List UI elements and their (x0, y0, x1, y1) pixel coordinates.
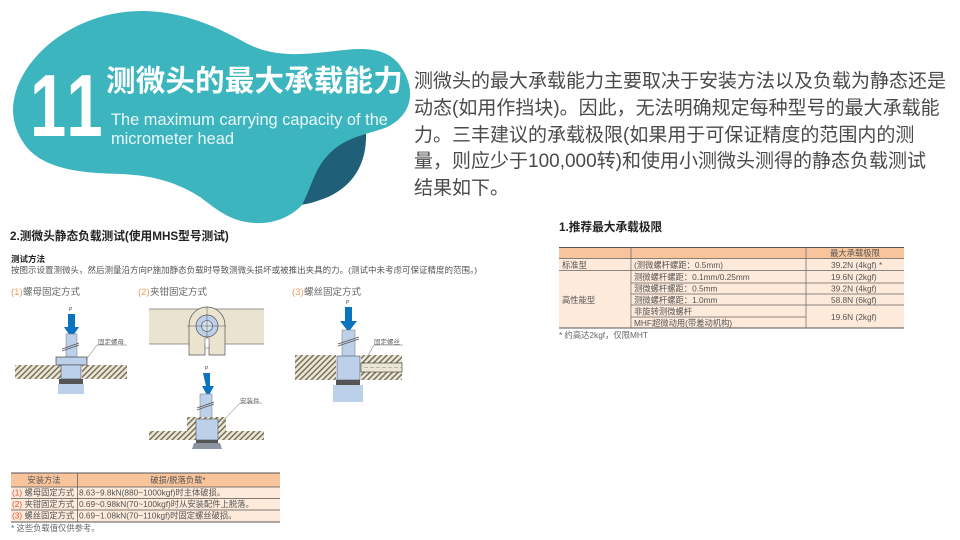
diagram 1: nut fixing: P (69, 307, 73, 313)
table: recommended limits: 测微螺杆螺距：1.0mm (634, 295, 718, 305)
section number: 11 (30, 56, 106, 155)
table: breaking load: 安装方法 (27, 475, 61, 485)
body paragraph (414, 70, 946, 198)
section heading: recommended limits: 1.推荐最大承载极限 (559, 221, 662, 234)
table: recommended limits: 58.8N (6kgf) (831, 295, 877, 305)
diagram 1: nut fixing (11, 286, 127, 394)
table: recommended limits (559, 247, 904, 340)
diagram 3: screw fixing: (3) (292, 287, 304, 298)
diagram 1: nut fixing: 螺母固定方式 (23, 286, 81, 298)
body paragraph: 力。三丰建议的承载极限(如果用于可保证精度的范围内的测 (414, 124, 914, 146)
table: breaking load: (1) 螺母固定方式 (12, 488, 75, 498)
table: breaking load: 0.69~1.08kN(70~110kgf)时固定螺丝破损。 (79, 510, 237, 520)
diagram 1: nut fixing: (1) (11, 287, 23, 298)
diagram 2: clamp fixing (138, 286, 264, 449)
test method text: 按图示设置测微头，然后测量沿方向P施加静态负载时导致测微头损坏或被推出夹具的力。(测试中未考虑可保证精度的范围。) (11, 265, 477, 275)
title: 测微头的最大承载能力 (106, 65, 403, 98)
table: breaking load: 破损/脱落负载* (150, 475, 206, 485)
table: breaking load: 0.69~0.98kN(70~100kgf)时从安装配件上脱落。 (79, 499, 254, 509)
table: recommended limits: 19.6N (2kgf) (831, 312, 877, 322)
body paragraph: 量，则应少于100,000转)和使用小测微头测得的静态负载测试 (414, 150, 926, 172)
table: breaking load (11, 473, 280, 533)
table: recommended limits: (测微螺杆螺距：0.5mm) (634, 260, 723, 270)
table: recommended limits: 标准型 (562, 260, 587, 270)
section heading: static load test: 2.测微头静态负载测试(使用MHS型号测试) (10, 230, 229, 243)
test method text: 测试方法 (11, 254, 45, 264)
body paragraph: 测微头的最大承载能力主要取决于安装方法以及负载为静态还是 (414, 70, 946, 92)
diagram 2: clamp fixing: 安装件 (240, 396, 260, 405)
english subtitle: micrometer head (111, 130, 234, 148)
table: recommended limits: 39.2N (4kgf) (831, 284, 877, 294)
diagram 2: clamp fixing: P (205, 366, 209, 372)
diagram 3: screw fixing: P (346, 300, 350, 306)
table: recommended limits: 39.2N (4kgf) * (831, 260, 883, 270)
table: recommended limits: MHF超微动用(带差动机构) (634, 318, 732, 328)
table: recommended limits: * 约高达2kgf，仅限MHT (559, 330, 648, 340)
table: recommended limits: 测微螺杆螺距：0.1mm/0.25mm (634, 272, 750, 282)
diagram 2: clamp fixing: (2) (138, 287, 150, 298)
table: breaking load: (2) 夹钳固定方式 (12, 499, 75, 509)
body paragraph: 结果如下。 (414, 178, 509, 198)
english subtitle: The maximum carrying capacity of the (111, 111, 388, 129)
table: breaking load: * 这些负载值仅供参考。 (11, 523, 100, 533)
diagram 2: clamp fixing: 夹钳固定方式 (150, 286, 208, 298)
table: recommended limits: 高性能型 (562, 295, 595, 305)
diagram 3: screw fixing: 固定螺丝 (374, 337, 400, 346)
diagram 3: screw fixing: 螺丝固定方式 (304, 286, 362, 298)
diagram 1: nut fixing: 固定螺母 (98, 337, 124, 346)
table: recommended limits: 测微螺杆螺距：0.5mm (634, 284, 718, 294)
test method text (11, 254, 477, 275)
table: breaking load: 8.63~9.8kN(880~1000kgf)时主体破损。 (79, 488, 225, 498)
english subtitle (111, 111, 388, 148)
body paragraph: 动态(如用作挡块)。因此，无法明确规定每种型号的最大承载能 (414, 98, 940, 118)
table: breaking load: (3) 螺丝固定方式 (12, 510, 75, 520)
table: recommended limits: 最大承载极限 (830, 248, 880, 258)
table: recommended limits: 非旋转测微螺杆 (634, 306, 692, 316)
table: recommended limits: 19.6N (2kgf) (831, 272, 877, 282)
diagram 3: screw fixing (292, 286, 403, 402)
